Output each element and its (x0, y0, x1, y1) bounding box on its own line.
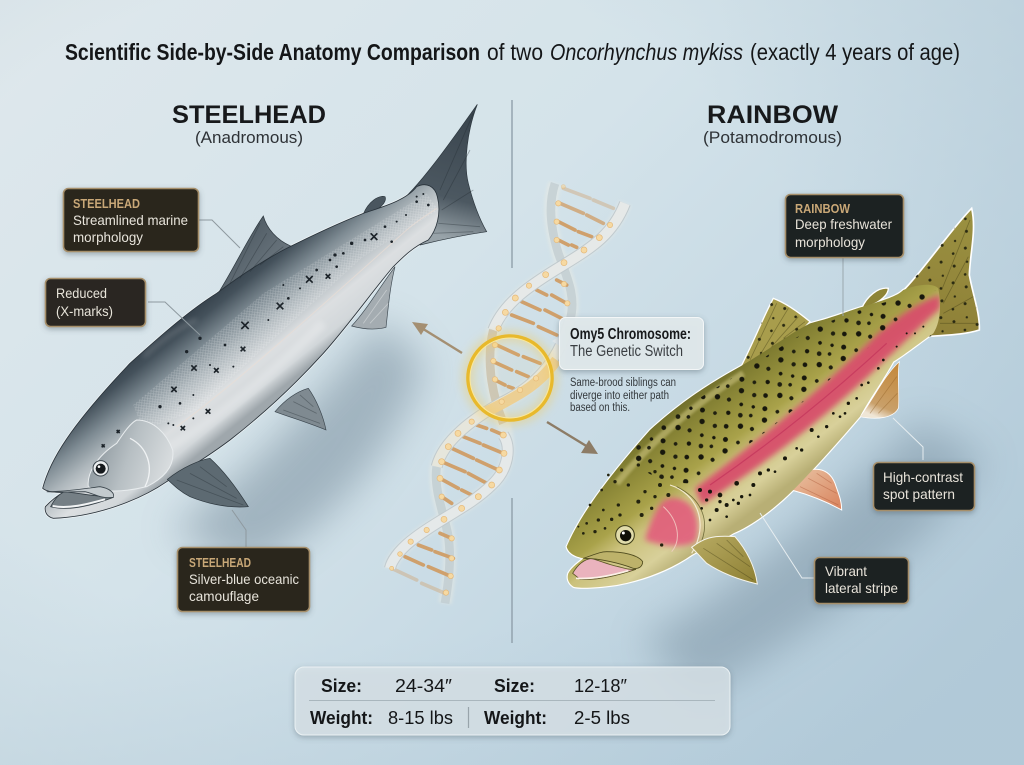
callout: silver-blue camouflage: STEELHEAD (189, 556, 251, 570)
title: Scientific Side-by-Side Anatomy Comparison (65, 39, 480, 65)
heading: steelhead: STEELHEAD (172, 101, 326, 129)
callout: deep freshwater morphology (786, 194, 904, 258)
panel: size and weight comparison: 24-34″ (395, 676, 453, 696)
text: same-brood siblings note (570, 377, 676, 414)
callout: streamlined marine morphology (64, 188, 198, 252)
callout: reduced x-marks: Reduced (56, 285, 107, 301)
fin: rainbow adipose (862, 288, 888, 308)
callout: deep freshwater morphology: morphology (795, 234, 865, 250)
outline halo: steelhead (43, 185, 439, 518)
tail spots: rainbow (897, 208, 979, 337)
callout: silver-blue camouflage: Silver-blue oceanic (189, 571, 299, 587)
eye: rainbow (616, 526, 634, 544)
connector: steelhead morphology (198, 220, 240, 248)
divider: center vertical line (511, 100, 513, 643)
callout: streamlined marine morphology: Streamlined marine (73, 212, 188, 228)
fish: rainbow (567, 208, 979, 588)
callout: vibrant lateral stripe (814, 558, 908, 604)
arrow: toward rainbow (547, 422, 598, 454)
fin: steelhead adipose (363, 196, 385, 214)
gill line: steelhead (130, 438, 149, 487)
fin: rainbow tail (897, 208, 979, 337)
fin: rainbow anal (860, 362, 899, 418)
fin: steelhead pectoral (167, 458, 248, 507)
spots: rainbow upper flank (627, 290, 938, 483)
beads (390, 185, 613, 595)
front strands (390, 203, 625, 568)
panel: size and weight comparison: 12-18″ (574, 676, 628, 696)
callout: high-contrast spot pattern: High-contrast (883, 469, 963, 485)
spots: rainbow lower flank (698, 326, 924, 521)
callout: silver-blue camouflage (178, 548, 310, 612)
callout: reduced x-marks: (X-marks) (56, 303, 113, 319)
shadow: steelhead (170, 320, 425, 570)
callout: high-contrast spot pattern (874, 462, 974, 510)
callout: silver-blue camouflage: camouflage (189, 588, 259, 604)
title: (exactly 4 years of age) (750, 39, 960, 65)
outline halo: rainbow (567, 285, 940, 588)
heading: rainbow: (Potamodromous) (703, 128, 842, 147)
fish: steelhead (43, 104, 487, 518)
panel: size and weight comparison: Size: (321, 676, 362, 696)
base-pair rungs (392, 188, 613, 593)
fin: rainbow pelvic (792, 469, 842, 510)
callout: deep freshwater morphology: RAINBOW (795, 202, 850, 216)
callout: deep freshwater morphology: Deep freshwater (795, 216, 892, 232)
panel: size and weight comparison: Size: (494, 676, 535, 696)
text: same-brood siblings note: based on this. (570, 402, 630, 414)
dna helix (390, 183, 625, 603)
connector: rainbow morphology (842, 258, 844, 316)
fin rays: rainbow (703, 220, 978, 580)
body: steelhead (43, 185, 439, 518)
title: Oncorhynchus mykiss (550, 39, 743, 65)
mouth: rainbow (573, 552, 643, 580)
arrow: toward steelhead (412, 322, 462, 353)
heading: rainbow (703, 101, 842, 147)
title: of two (487, 39, 543, 65)
heading: steelhead (172, 101, 326, 147)
fin: rainbow dorsal (738, 298, 810, 372)
body: rainbow (567, 285, 940, 588)
head: steelhead gill cover (88, 420, 173, 491)
panel: size and weight comparison: Weight: (310, 708, 373, 728)
shadow: rainbow (640, 420, 985, 695)
callout: omy5 chromosome: Omy5 Chromosome: (570, 326, 691, 343)
callout: vibrant lateral stripe: lateral stripe (825, 580, 898, 596)
heading: steelhead: (Anadromous) (195, 128, 303, 147)
fin: steelhead anal (352, 267, 395, 329)
panel: size and weight comparison: Weight: (484, 708, 547, 728)
fin rays: steelhead (177, 113, 480, 505)
mouth: steelhead (47, 487, 114, 508)
callout: streamlined marine morphology: morphology (73, 229, 143, 245)
eye: steelhead (93, 461, 108, 476)
callout: omy5 chromosome: The Genetic Switch (570, 343, 683, 360)
connector: lateral stripe (760, 513, 814, 578)
fin: steelhead tail (397, 104, 487, 245)
connector: x-marks (148, 302, 200, 335)
heading: rainbow: RAINBOW (707, 101, 838, 129)
connector: spot pattern (893, 418, 923, 460)
panel: size and weight comparison: 8-15 lbs (388, 708, 453, 728)
panel: size and weight comparison: 2-5 lbs (574, 708, 630, 728)
fin: rainbow pectoral (692, 536, 757, 584)
callout: omy5 chromosome (552, 318, 704, 370)
callout: reduced x-marks (46, 278, 146, 326)
body details: rainbow (617, 295, 940, 553)
connector: camouflage (232, 510, 246, 547)
title (65, 39, 960, 65)
spots: steelhead x-marks (102, 193, 430, 447)
dorsal spots: rainbow (738, 298, 810, 372)
panel: size and weight comparison (295, 667, 730, 735)
helix glow (390, 183, 625, 603)
fin: steelhead dorsal (215, 216, 291, 298)
callout: vibrant lateral stripe: Vibrant (825, 563, 867, 579)
text: same-brood siblings note: Same-brood siblings can (570, 377, 676, 389)
text: same-brood siblings note: diverge into either path (570, 390, 669, 402)
callout: high-contrast spot pattern: spot pattern (883, 486, 955, 502)
highlight ring: omy5 location (468, 336, 552, 420)
spots: rainbow head (577, 463, 670, 547)
fin: steelhead pelvic (275, 388, 326, 430)
back strands (436, 183, 572, 603)
callout: streamlined marine morphology: STEELHEAD (73, 197, 140, 211)
body details: steelhead (130, 193, 438, 470)
